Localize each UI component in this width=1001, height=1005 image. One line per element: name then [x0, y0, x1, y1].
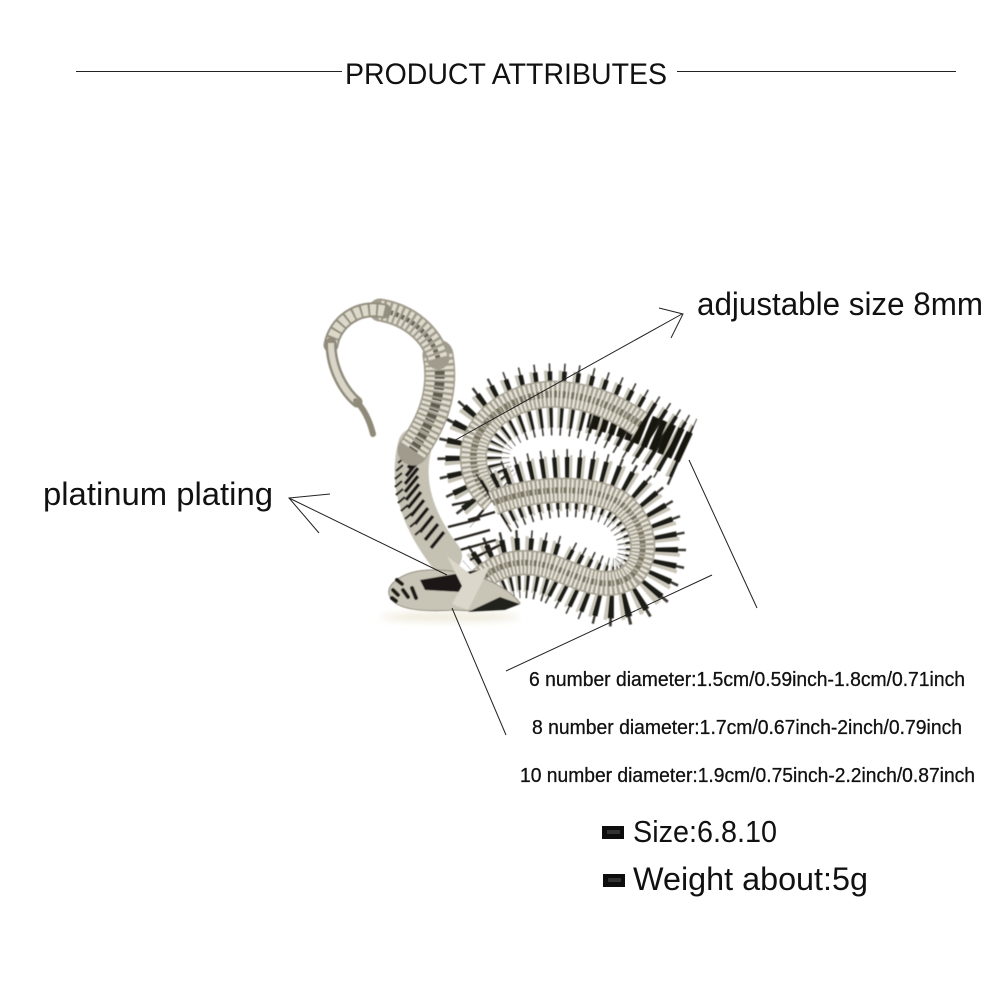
dimension line: head: [452, 608, 506, 735]
ring shadow: [380, 613, 520, 621]
dimension line: bottom: [506, 575, 712, 671]
spines at body junction: [448, 500, 500, 560]
title: PRODUCT ATTRIBUTES: [345, 58, 667, 91]
dimension line: right: [689, 460, 757, 608]
size specification list: 6 number diameter:1.5cm/0.59inch-1.8cm/0.71inch: [529, 669, 965, 691]
snake neck and tail: [331, 310, 445, 556]
snake head: [389, 556, 520, 612]
snake lower body with spines: [480, 483, 652, 592]
attribute: size: Size:6.8.10: [633, 814, 777, 849]
snake rear body with spines: [473, 394, 686, 500]
attribute: weight: Weight about:5g: [633, 861, 868, 897]
arrow: adjustable size pointer: [450, 308, 683, 443]
size specification list: 10 number diameter:1.9cm/0.75inch-2.2inch/0.87inch: [520, 765, 975, 787]
arrow: platinum plating pointer: [289, 494, 447, 575]
product image: silver snake ring: [331, 310, 686, 621]
size specification list: 8 number diameter:1.7cm/0.67inch-2inch/0.79inch: [532, 717, 962, 739]
callout: adjustable size: adjustable size 8mm: [697, 286, 983, 322]
callout: platinum plating: platinum plating: [43, 476, 273, 512]
size specification list: [520, 669, 975, 787]
